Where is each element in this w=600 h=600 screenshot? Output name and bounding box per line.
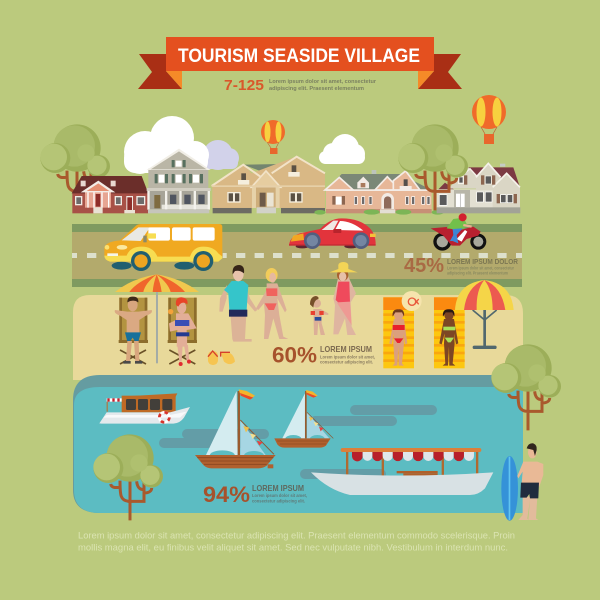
person: surfer xyxy=(517,443,543,520)
person: woman in sun hat xyxy=(329,262,358,335)
stat description: adipiscing elit. Praesent elementum xyxy=(447,270,508,276)
stat description xyxy=(252,493,307,504)
stat description: Lorem ipsum dolor sit amet, xyxy=(252,493,307,498)
stat number: 60% xyxy=(272,342,317,368)
person: blonde woman xyxy=(256,268,288,339)
person: man in teal shirt xyxy=(219,265,257,342)
stat heading: LOREM IPSUM xyxy=(320,344,372,354)
person: child xyxy=(310,296,328,335)
boat: passenger launch xyxy=(99,393,190,424)
stat description: consectetur adipiscing elit. xyxy=(320,360,373,364)
surfboard xyxy=(501,456,518,521)
beach stat: 60% xyxy=(272,342,375,368)
subtitle text: adipiscing elit. Praesent elementum xyxy=(269,86,364,92)
cloud: right small xyxy=(319,134,365,164)
title banner xyxy=(138,37,462,89)
tree: beach right xyxy=(491,344,561,430)
vehicle: red car xyxy=(289,218,376,249)
tree: behind road right xyxy=(398,124,468,210)
beach mat with sunbather: light skin xyxy=(383,297,414,368)
umbrella: right xyxy=(455,280,514,349)
beach mat with sunbather: dark skin xyxy=(434,297,465,368)
house: red cottage xyxy=(72,176,148,213)
road xyxy=(72,224,522,287)
stat description: Lorem ipsum dolor sit amet, consectetur xyxy=(447,266,514,270)
stat number: 45% xyxy=(404,255,444,277)
house: cream colonial xyxy=(437,163,520,213)
footer paragraph: mollis magna elit, eu finibus velit aliquet sit amet. Sed nec vulputate nibh. Vestibulum in interdum nunc. xyxy=(78,542,508,554)
title: TOURISM SEASIDE VILLAGE xyxy=(178,45,420,67)
tree: sea left xyxy=(93,434,163,520)
person: woman on deck chair xyxy=(168,297,197,366)
subtitle text: Lorem ipsum dolor sit amet, consectetur xyxy=(269,79,377,85)
stat description: Lorem ipsum dolor sit amet, xyxy=(320,354,375,360)
road stat: 45% xyxy=(404,255,518,277)
stat number: 94% xyxy=(203,482,250,507)
boat: large sailboat xyxy=(195,389,276,468)
house: grey two storey xyxy=(147,149,211,213)
subtitle text xyxy=(269,79,377,92)
footer paragraph: Lorem ipsum dolor sit amet, consectetur adipiscing elit. Praesent elementum commodo scelerisque. Proin xyxy=(78,530,515,542)
stat description xyxy=(320,354,375,364)
footer paragraph xyxy=(78,530,515,554)
boat: small sailboat xyxy=(274,390,333,448)
panel: sea xyxy=(73,375,523,513)
clouds: white and lilac xyxy=(124,116,239,174)
stat heading: LOREM IPSUM DOLOR xyxy=(447,259,518,266)
stat description xyxy=(447,266,514,276)
stat description: consectetur adipiscing elit. xyxy=(252,498,305,504)
vehicle: motorbike with rider xyxy=(431,213,486,251)
icon: flip flops xyxy=(208,351,235,365)
vehicle: yellow van xyxy=(104,224,222,271)
subtitle number: 7-125 xyxy=(224,77,264,94)
boat: big canopy boat xyxy=(311,448,493,495)
tree: far left xyxy=(40,124,110,210)
sea stat: 94% xyxy=(203,482,307,507)
house: pink manor xyxy=(314,170,444,215)
balloon: small xyxy=(261,120,285,154)
person: man on deck chair xyxy=(115,297,152,364)
panel: beach xyxy=(73,295,523,380)
stat heading: LOREM IPSUM xyxy=(252,483,304,493)
balloon: large xyxy=(472,95,506,144)
houses row xyxy=(72,149,520,215)
house: tan villa xyxy=(212,156,325,213)
umbrella: left xyxy=(115,274,199,363)
sea shadows xyxy=(159,405,437,479)
icon: ball badge xyxy=(402,291,422,311)
